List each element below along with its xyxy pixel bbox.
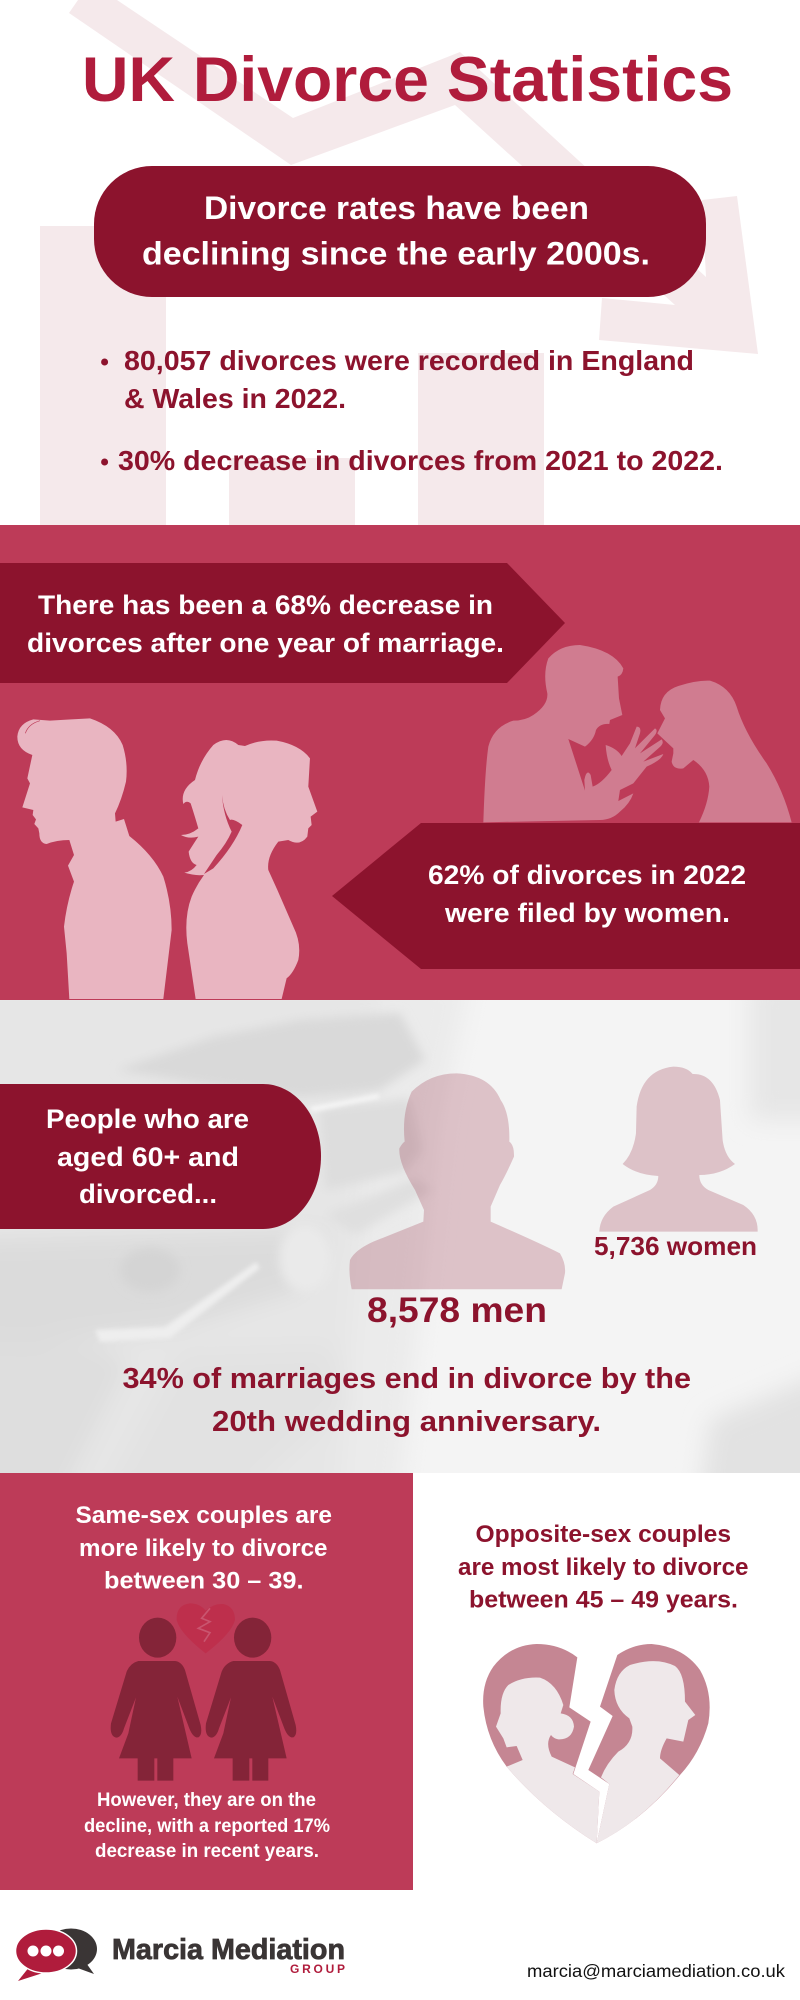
logo wordmark: Marcia Mediation	[112, 1934, 345, 1966]
background chart: falling arrow and bars	[40, 0, 758, 525]
text: on the decline note: decline, with a reported 17%	[84, 1815, 330, 1837]
stat: 8,578 men: 8,578 men	[367, 1291, 547, 1330]
background: blurred greyscale hands	[0, 980, 800, 1500]
text: opposite-sex heading: are most likely to divorce	[458, 1554, 748, 1581]
panel: opposite-sex couples	[458, 1521, 748, 1843]
icon: speech bubbles	[16, 1928, 97, 1981]
text: on the decline note: decrease in recent years.	[95, 1840, 319, 1862]
logo subtitle: GROUP	[290, 1962, 345, 1976]
text: on the decline note	[84, 1789, 330, 1862]
text: same-sex heading	[76, 1502, 332, 1594]
text: same-sex heading: more likely to divorce	[79, 1535, 328, 1562]
icon: male bust	[349, 1073, 565, 1289]
text: same-sex heading: between 30 – 39.	[104, 1568, 304, 1594]
text: 34% of marriages: 20th wedding anniversary.	[212, 1406, 601, 1438]
callout: 68% decrease arrow: There has been a 68% decrease in	[38, 590, 493, 620]
text: opposite-sex heading	[458, 1521, 748, 1614]
callout: aged 60+ pill	[0, 1084, 321, 1229]
panel: same-sex couples	[0, 1473, 413, 1890]
callout: aged 60+ pill: People who are	[46, 1104, 249, 1134]
bullet list	[101, 345, 723, 476]
icon: arguing couple	[483, 645, 792, 822]
text: opposite-sex heading: Opposite-sex couples	[476, 1521, 731, 1548]
bullet list: 80,057 divorces were recorded in England	[124, 345, 694, 376]
text: 34% of marriages	[122, 1363, 691, 1438]
callout: 62% filed by women arrow: were filed by women.	[444, 898, 730, 928]
callout: declining rates pill: declining since the early 2000s.	[142, 236, 650, 272]
icon: man and woman back to back	[17, 718, 317, 999]
callout: 62% filed by women arrow: 62% of divorces in 2022	[428, 860, 746, 890]
callout: 68% decrease arrow	[0, 563, 565, 683]
text: same-sex heading: Same-sex couples are	[76, 1502, 332, 1529]
panel: silhouettes on crimson	[0, 525, 800, 1000]
callout: aged 60+ pill: aged 60+ and	[57, 1142, 239, 1172]
bullet list: 30% decrease in divorces from 2021 to 2022.	[118, 445, 723, 476]
callout: aged 60+ pill: divorced...	[79, 1179, 217, 1209]
text: 34% of marriages: 34% of marriages end in divorce by the	[122, 1363, 691, 1395]
panel: top intro	[40, 0, 758, 525]
icon: two women and broken heart	[111, 1603, 296, 1781]
text: on the decline note: However, they are on the	[97, 1789, 316, 1811]
callout: 68% decrease arrow: divorces after one year of marriage.	[27, 628, 504, 658]
bullet list: & Wales in 2022.	[124, 383, 346, 414]
title: UK Divorce Statistics	[82, 45, 733, 115]
icon: broken heart with couple	[483, 1644, 710, 1843]
icon: female bust	[599, 1067, 758, 1232]
text: opposite-sex heading: between 45 – 49 years.	[469, 1586, 738, 1614]
contact email: marcia@marciamediation.co.uk	[527, 1961, 785, 1981]
callout: 62% filed by women arrow	[332, 823, 800, 969]
callout: declining rates pill	[94, 166, 706, 297]
stat: 5,736 women: 5,736 women	[594, 1231, 757, 1261]
footer logo: Marcia Mediation Group	[16, 1928, 345, 1981]
panel: older divorcees over hands photo	[0, 980, 800, 1500]
callout: declining rates pill: Divorce rates have been	[204, 190, 589, 226]
